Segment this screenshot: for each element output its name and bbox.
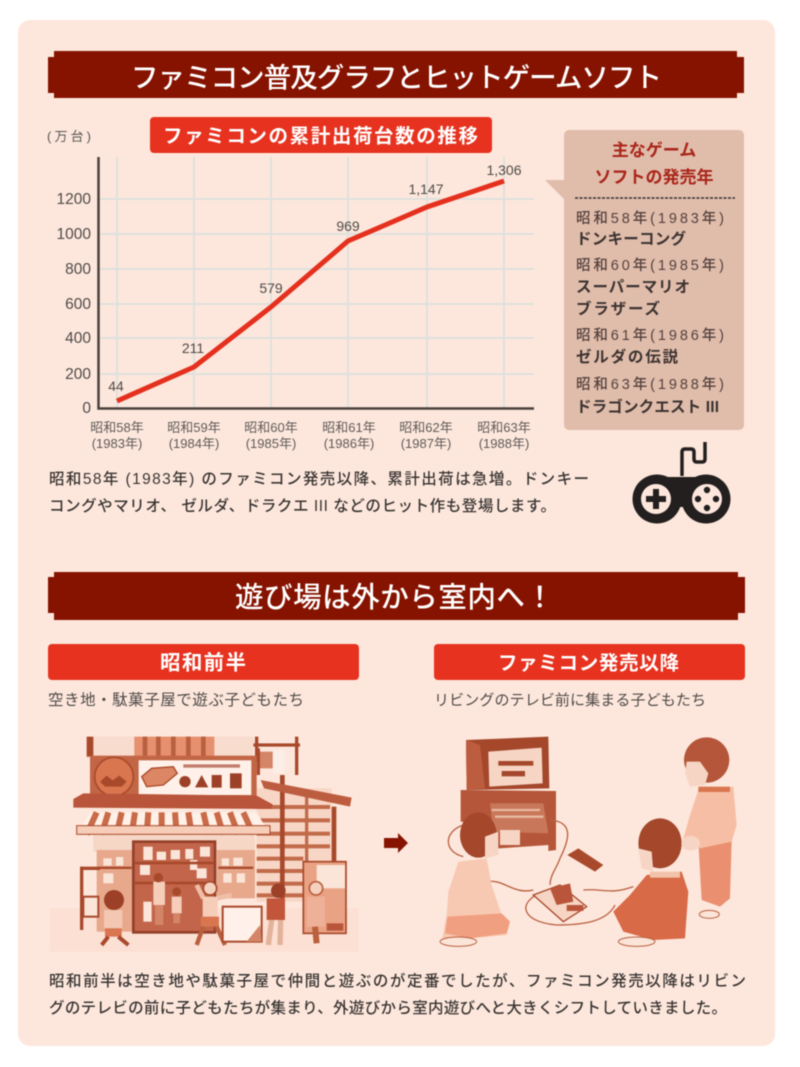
y axis labels: 1200 bbox=[57, 191, 91, 208]
data value labels: 969 bbox=[336, 218, 360, 234]
game list: ゼルダの伝説 bbox=[576, 347, 678, 366]
data value labels bbox=[108, 162, 522, 394]
game list: ドラゴンクエスト III bbox=[576, 397, 719, 416]
game list: ブラザーズ bbox=[576, 299, 660, 318]
chart axes bbox=[98, 157, 534, 408]
y axis unit: (万台) bbox=[47, 129, 91, 144]
caption: after Famicom: リビングのテレビ前に集まる子どもたち bbox=[434, 692, 706, 709]
vending machine bbox=[303, 862, 346, 933]
data value labels: 1,147 bbox=[408, 181, 444, 197]
game list bbox=[576, 210, 724, 416]
arrow: from outside to inside bbox=[384, 833, 408, 853]
child sitting right bbox=[613, 818, 688, 946]
sidebar heading bbox=[594, 141, 714, 187]
icon: game controller bbox=[632, 442, 730, 524]
y axis labels: 1000 bbox=[57, 226, 91, 243]
game list: 昭和61年(1986年) bbox=[576, 327, 724, 344]
chart title bbox=[150, 117, 492, 153]
side building bbox=[253, 737, 352, 902]
shop upper wall bbox=[87, 737, 253, 758]
data value labels: 1,306 bbox=[486, 162, 522, 178]
children in front of store bbox=[102, 873, 325, 945]
illustration: candy store with children bbox=[50, 737, 358, 952]
awning bbox=[77, 812, 270, 834]
y axis labels: 0 bbox=[82, 400, 91, 417]
game list: 昭和60年(1985年) bbox=[576, 257, 724, 274]
x axis year labels: (1985年) bbox=[246, 436, 296, 451]
label: after Famicom release bbox=[434, 644, 745, 680]
x axis year labels: 昭和59年 bbox=[167, 420, 221, 435]
y axis labels bbox=[57, 191, 91, 417]
panel: main game release years bbox=[545, 130, 744, 430]
game list: 昭和58年(1983年) bbox=[576, 210, 724, 227]
data value labels: 579 bbox=[259, 280, 283, 296]
x axis year labels: (1984年) bbox=[169, 436, 219, 451]
eave bbox=[73, 793, 273, 809]
x axis year labels: 昭和60年 bbox=[244, 420, 298, 435]
text block: chart summary bbox=[49, 470, 589, 515]
heading: graph section banner: ファミコン普及グラフとヒットゲームソフト bbox=[131, 62, 662, 93]
television bbox=[461, 737, 556, 851]
text block: chart summary: 昭和58年 (1983年) のファミコン発売以降、累計出荷は急増。ドンキー bbox=[49, 470, 589, 488]
game list: スーパーマリオ bbox=[576, 278, 690, 296]
label: early Showa: 昭和前半 bbox=[160, 652, 246, 674]
cartridge bbox=[567, 848, 603, 872]
data value labels: 44 bbox=[108, 378, 124, 394]
shop sign bbox=[90, 756, 257, 797]
y axis labels: 800 bbox=[65, 261, 91, 278]
storefront bbox=[80, 835, 255, 932]
game list: ドンキーコング bbox=[576, 229, 686, 248]
illustration: children playing Famicom by the TV bbox=[440, 737, 737, 946]
caption: early Showa: 空き地・駄菓子屋で遊ぶ子どもたち bbox=[48, 691, 304, 709]
heading: playground section banner bbox=[48, 572, 745, 620]
text block: chart summary: コングやマリオ、 ゼルダ、ドラクエ III などのヒット作も登場します。 bbox=[49, 496, 556, 515]
x axis year labels: (1988年) bbox=[479, 436, 529, 451]
game list: 昭和63年(1988年) bbox=[576, 376, 724, 393]
x axis year labels: (1986年) bbox=[324, 436, 374, 451]
x axis year labels bbox=[90, 420, 531, 451]
label: early Showa bbox=[48, 644, 359, 680]
x axis year labels: 昭和58年 bbox=[90, 420, 144, 435]
child sitting left bbox=[440, 812, 510, 946]
label: after Famicom release: ファミコン発売以降 bbox=[498, 652, 679, 674]
text block: closing summary: 昭和前半は空き地や駄菓子屋で仲間と遊ぶのが定番でしたが、ファミコン発売以降はリビン bbox=[49, 971, 746, 990]
x axis year labels: (1987年) bbox=[401, 436, 451, 451]
y axis labels: 400 bbox=[65, 330, 91, 347]
heading: playground section banner: 遊び場は外から室内へ！ bbox=[235, 582, 554, 614]
y axis labels: 200 bbox=[65, 366, 91, 383]
x axis year labels: 昭和63年 bbox=[477, 420, 531, 435]
heading: graph section banner bbox=[48, 51, 744, 98]
text block: closing summary: グのテレビの前に子どもたちが集まり、外遊びから室内遊びへと大きくシフトしていきました。 bbox=[49, 998, 727, 1017]
child standing bbox=[681, 737, 737, 918]
chart: cumulative shipments line chart bbox=[47, 117, 534, 451]
x axis year labels: 昭和62年 bbox=[399, 420, 453, 435]
chart title: ファミコンの累計出荷台数の推移 bbox=[163, 124, 478, 148]
text block: closing summary bbox=[49, 971, 746, 1017]
y axis labels: 600 bbox=[65, 296, 91, 313]
data value labels: 211 bbox=[182, 340, 204, 356]
console bbox=[533, 883, 587, 922]
sidebar heading: 主なゲーム bbox=[612, 141, 696, 160]
x axis year labels: (1983年) bbox=[92, 436, 142, 451]
x axis year labels: 昭和61年 bbox=[322, 420, 376, 435]
sidebar heading: ソフトの発売年 bbox=[594, 167, 714, 187]
controller cords bbox=[448, 820, 633, 925]
data line bbox=[117, 181, 504, 401]
